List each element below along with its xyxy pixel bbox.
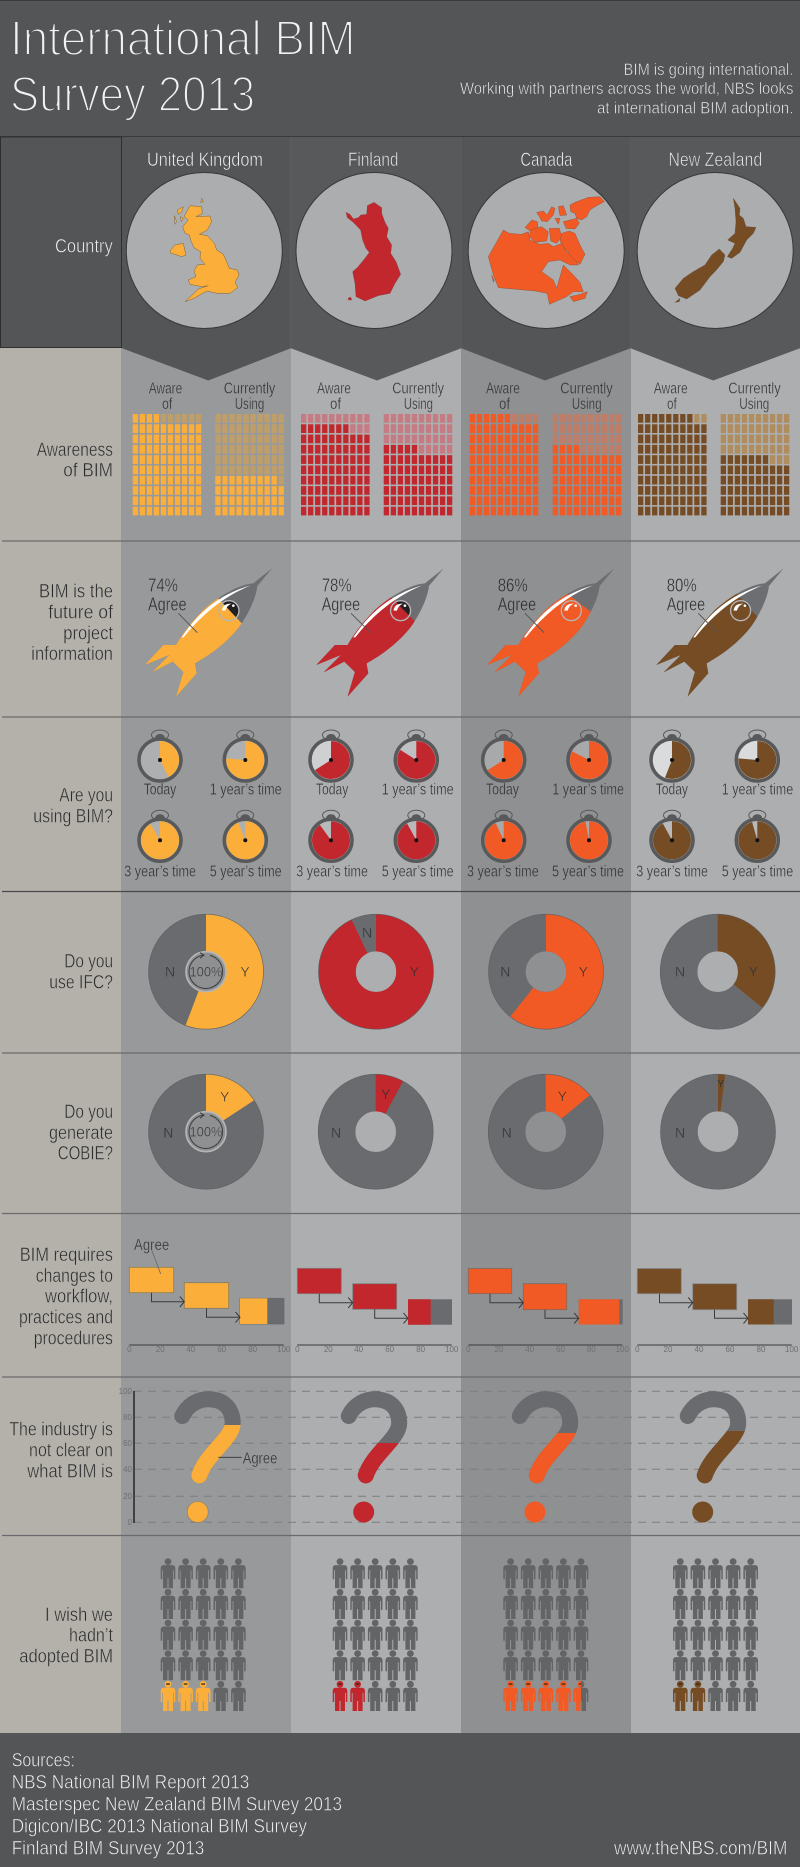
rocket: UK 74%: 74%	[148, 576, 178, 596]
stopwatches: Canada	[467, 730, 624, 881]
row label: Are you using BIM?: using BIM?	[33, 806, 113, 827]
row label: Do you use IFC?: Do you	[64, 952, 113, 973]
people grid: Finland	[333, 1558, 418, 1711]
waffle headings: Finland: Using	[404, 396, 433, 413]
question mark: UK: Agree	[243, 1450, 277, 1467]
country row label box	[0, 137, 122, 348]
row label: Awareness of BIM	[37, 440, 113, 482]
panel: Canada header	[461, 137, 631, 380]
footer panel	[0, 1733, 800, 1867]
rocket: Finland 78%: Agree	[322, 595, 360, 615]
panel: United Kingdom header	[122, 137, 291, 380]
title: International BIM	[10, 11, 356, 66]
map: Canada	[488, 197, 604, 304]
title	[10, 11, 356, 122]
stopwatches: UK: 3 year’s time	[124, 864, 196, 881]
flow chart: Finland: 40	[354, 1345, 364, 1354]
waffle: New Zealand using	[720, 414, 790, 516]
rocket: UK 74%: Agree	[148, 595, 186, 615]
donut: IFC Finland: Y	[410, 964, 420, 980]
flow chart: New Zealand: 0	[635, 1345, 640, 1354]
waffle headings: Finland: Currently	[392, 380, 444, 397]
waffle headings: New Zealand: Aware	[654, 380, 688, 397]
waffle headings: Finland: of	[330, 396, 342, 413]
waffle headings: United Kingdom: Using	[235, 396, 264, 413]
chart grid and axis: 20	[123, 1492, 133, 1501]
sources list	[12, 1751, 342, 1860]
flow chart: Canada: 0	[466, 1345, 471, 1354]
donut: IFC Finland: N	[362, 924, 372, 940]
donut: COBIE New Zealand: N	[675, 1125, 685, 1141]
header panel	[0, 0, 800, 138]
chart grid and axis: 80	[123, 1413, 133, 1422]
flow chart: New Zealand: 20	[664, 1345, 673, 1354]
row label: I wish we hadn't adopted BIM: hadn’t	[69, 1626, 114, 1647]
donut: IFC New Zealand	[660, 914, 775, 1029]
row label: BIM requires changes: practices and	[19, 1307, 113, 1328]
row label: I wish we hadn't adopted BIM	[19, 1605, 114, 1668]
people grid: UK	[161, 1558, 246, 1711]
stopwatches: Canada: Today	[486, 782, 519, 799]
donut: COBIE Canada: N	[502, 1125, 512, 1141]
row label: Do you generate COBIE?: generate	[49, 1123, 113, 1144]
waffle headings: Canada: Currently	[560, 380, 613, 397]
rocket: Canada 86%	[487, 568, 614, 697]
question mark: New Zealand	[688, 1399, 738, 1522]
waffle: Finland using	[384, 414, 452, 516]
donut: COBIE New Zealand	[660, 1074, 776, 1189]
map: New Zealand	[675, 198, 756, 302]
stopwatches: UK: Today	[144, 782, 176, 799]
rocket: Finland 78%: 78%	[322, 576, 352, 596]
row label: BIM is the future: project	[63, 623, 114, 644]
row label: The industry is not clear	[9, 1420, 113, 1482]
stopwatches: UK: 5 year’s time	[210, 864, 282, 881]
flow chart: Canada: 80	[587, 1345, 596, 1354]
flow chart: Canada: 60	[556, 1345, 565, 1354]
flow chart: Finland: 80	[416, 1345, 426, 1354]
stopwatches: UK	[124, 730, 282, 881]
row label: Are you using BIM?: Are you	[59, 785, 113, 806]
donut: COBIE UK: Y	[220, 1089, 230, 1105]
waffle headings: United Kingdom: of	[162, 396, 173, 413]
flow chart: Finland	[295, 1268, 459, 1354]
stopwatches: Finland: 1 year’s time	[382, 782, 454, 799]
flow chart: UK: 60	[217, 1345, 227, 1354]
waffle headings: Canada: Using	[572, 396, 602, 413]
waffle headings: Finland: Aware	[317, 380, 351, 397]
waffle headings: New Zealand	[654, 380, 781, 413]
row label: Do you generate COBIE?: COBIE?	[58, 1143, 113, 1164]
donut: IFC UK: 100%	[190, 964, 222, 980]
row label: Do you generate COBIE?: Do you	[64, 1102, 113, 1123]
waffle headings: New Zealand: Currently	[728, 380, 781, 397]
stopwatches: UK: 1 year’s time	[210, 782, 282, 799]
flow chart: UK: 80	[248, 1345, 258, 1354]
donut: IFC Finland	[318, 914, 434, 1029]
waffle: Canada aware	[470, 414, 538, 516]
stopwatches: Canada: 5 year’s time	[552, 864, 624, 881]
row label: BIM is the future: BIM is the	[39, 581, 113, 602]
stopwatches: Finland: Today	[316, 782, 348, 799]
flow chart: Finland: 0	[295, 1345, 300, 1354]
donut: IFC Canada	[488, 914, 604, 1029]
donut: COBIE UK: N	[163, 1125, 173, 1141]
waffle headings: New Zealand: of	[667, 396, 677, 413]
panel: Finland header: Finland	[348, 150, 398, 171]
row label: BIM is the future: information	[31, 644, 113, 665]
flow chart: New Zealand: 100	[785, 1345, 799, 1354]
donut: COBIE New Zealand: Y	[717, 1079, 724, 1090]
country row label box: Country	[55, 236, 113, 257]
row label: Do you generate COBIE?	[49, 1102, 113, 1164]
sources list: Sources:	[12, 1751, 75, 1772]
question mark: UK	[182, 1399, 277, 1522]
row label: Are you using BIM?	[33, 785, 113, 827]
row label: BIM requires changes: changes to	[36, 1266, 113, 1287]
flow chart: UK: 0	[127, 1345, 132, 1354]
stopwatches: New Zealand: Today	[656, 782, 688, 799]
row label: BIM is the future: future of	[48, 602, 114, 623]
sources list: NBS National BIM Report 2013	[12, 1773, 249, 1794]
waffle: Canada using	[552, 414, 622, 516]
panel: United Kingdom header: United Kingdom	[147, 150, 263, 171]
panel: New Zealand header	[631, 137, 800, 380]
flow chart: UK: 40	[186, 1345, 196, 1354]
row label: BIM requires changes: procedures	[34, 1328, 113, 1349]
question mark: Finland	[349, 1399, 399, 1522]
panel: Canada header: Canada	[520, 150, 573, 171]
donut: IFC Canada: Y	[579, 964, 589, 980]
title: Survey 2013	[10, 67, 255, 122]
people grid: New Zealand	[673, 1558, 758, 1711]
flow chart: Canada: 100	[616, 1345, 630, 1354]
waffle headings: New Zealand: Using	[739, 396, 769, 413]
row label: Awareness of BIM: of BIM	[63, 461, 113, 482]
flow chart: Canada	[466, 1268, 630, 1354]
donut: COBIE Finland: Y	[381, 1086, 391, 1102]
donut: IFC New Zealand: Y	[749, 964, 759, 980]
flow chart: Finland: 100	[445, 1345, 459, 1354]
chart grid and axis	[119, 1387, 800, 1527]
donut: IFC Canada: N	[500, 964, 510, 980]
row label: I wish we hadn't adopted BIM: adopted BIM	[19, 1647, 113, 1668]
rocket: Canada 86%: Agree	[498, 595, 536, 615]
waffle headings: United Kingdom: Aware	[149, 380, 182, 397]
row label: The industry is not clear: The industry is	[9, 1420, 113, 1441]
sources list: Finland BIM Survey 2013	[12, 1839, 204, 1860]
flow chart: UK	[127, 1237, 291, 1354]
chart grid and axis: 60	[123, 1439, 133, 1448]
chart grid and axis: 100	[119, 1387, 133, 1396]
chart grid and axis: 0	[128, 1518, 133, 1527]
map: Finland	[346, 202, 401, 301]
waffle headings: Finland	[317, 380, 444, 413]
donut: COBIE Canada: Y	[558, 1088, 568, 1104]
flow chart: New Zealand: 40	[695, 1345, 704, 1354]
row label: BIM requires changes: workflow,	[44, 1287, 113, 1308]
donut: IFC New Zealand: N	[675, 964, 685, 980]
waffle: UK using	[215, 414, 284, 516]
panel: Finland header	[291, 137, 461, 380]
donut: COBIE UK: 100%	[190, 1124, 222, 1140]
map: United Kingdom	[170, 198, 239, 302]
flow chart: Canada: 20	[495, 1345, 504, 1354]
flow chart: New Zealand	[635, 1268, 799, 1354]
sources list: Digicon/IBC 2013 National BIM Survey	[12, 1817, 307, 1838]
waffle: UK aware	[132, 414, 202, 516]
flow chart: UK: 100	[277, 1345, 291, 1354]
panel: New Zealand header: New Zealand	[668, 150, 762, 171]
rocket: New Zealand 80%: Agree	[667, 595, 705, 615]
row label: The industry is not clear: what BIM is	[26, 1461, 113, 1482]
donut: COBIE Finland	[318, 1074, 433, 1189]
row label: Awareness of BIM: Awareness	[37, 440, 113, 461]
rocket: Finland 78%	[316, 568, 444, 697]
waffle headings: United Kingdom: Currently	[224, 380, 275, 397]
row label: Do you use IFC?: use IFC?	[49, 972, 113, 993]
waffle headings: United Kingdom	[149, 380, 275, 413]
sources list: Masterspec New Zealand BIM Survey 2013	[12, 1795, 342, 1816]
flow chart: UK: Agree	[134, 1237, 169, 1254]
stopwatches: Canada: 3 year’s time	[467, 864, 539, 881]
waffle headings: Canada	[486, 380, 613, 413]
donut: COBIE UK	[148, 1074, 264, 1189]
column backgrounds	[121, 137, 800, 1733]
row label: BIM requires changes	[19, 1245, 113, 1349]
donut: COBIE Canada	[488, 1074, 603, 1189]
waffle: New Zealand aware	[638, 414, 707, 516]
stopwatches: Finland: 3 year’s time	[296, 864, 368, 881]
row label: BIM is the future	[31, 581, 114, 665]
flow chart: Canada: 40	[525, 1345, 535, 1354]
row label: BIM requires changes: BIM requires	[20, 1245, 113, 1266]
donut: IFC UK: N	[165, 964, 175, 980]
row label: Do you use IFC?	[49, 952, 113, 993]
rocket: Canada 86%: 86%	[498, 576, 528, 596]
stopwatches: Finland: 5 year’s time	[382, 864, 454, 881]
stopwatches: Finland	[296, 730, 454, 881]
rocket: UK 74%	[145, 568, 272, 697]
flow chart: New Zealand: 80	[757, 1345, 766, 1354]
row label: The industry is not clear: not clear on	[29, 1441, 113, 1462]
flow chart: New Zealand: 60	[726, 1345, 735, 1354]
donut: COBIE Finland: N	[331, 1125, 341, 1141]
waffle: Finland aware	[301, 414, 370, 516]
flow chart: UK: 20	[156, 1345, 165, 1354]
stopwatches: New Zealand: 3 year’s time	[636, 864, 708, 881]
donut: IFC UK	[148, 914, 264, 1029]
waffle headings: Canada: of	[499, 396, 511, 413]
rocket: New Zealand 80%	[656, 568, 784, 697]
stopwatches: New Zealand	[636, 730, 793, 881]
row dividers	[2, 541, 800, 1536]
flow chart: Finland: 20	[324, 1345, 333, 1354]
donut: IFC UK: Y	[240, 964, 250, 980]
row label: I wish we hadn't adopted BIM: I wish we	[45, 1605, 113, 1626]
flow chart: Finland: 60	[385, 1345, 395, 1354]
question mark: Canada	[520, 1399, 570, 1522]
rocket: New Zealand 80%: 80%	[667, 576, 697, 596]
people grid: Canada	[503, 1558, 588, 1711]
intro text	[460, 60, 793, 117]
stopwatches: Canada: 1 year’s time	[552, 782, 624, 799]
chart grid and axis: 40	[123, 1465, 133, 1474]
waffle headings: Canada: Aware	[486, 380, 520, 397]
